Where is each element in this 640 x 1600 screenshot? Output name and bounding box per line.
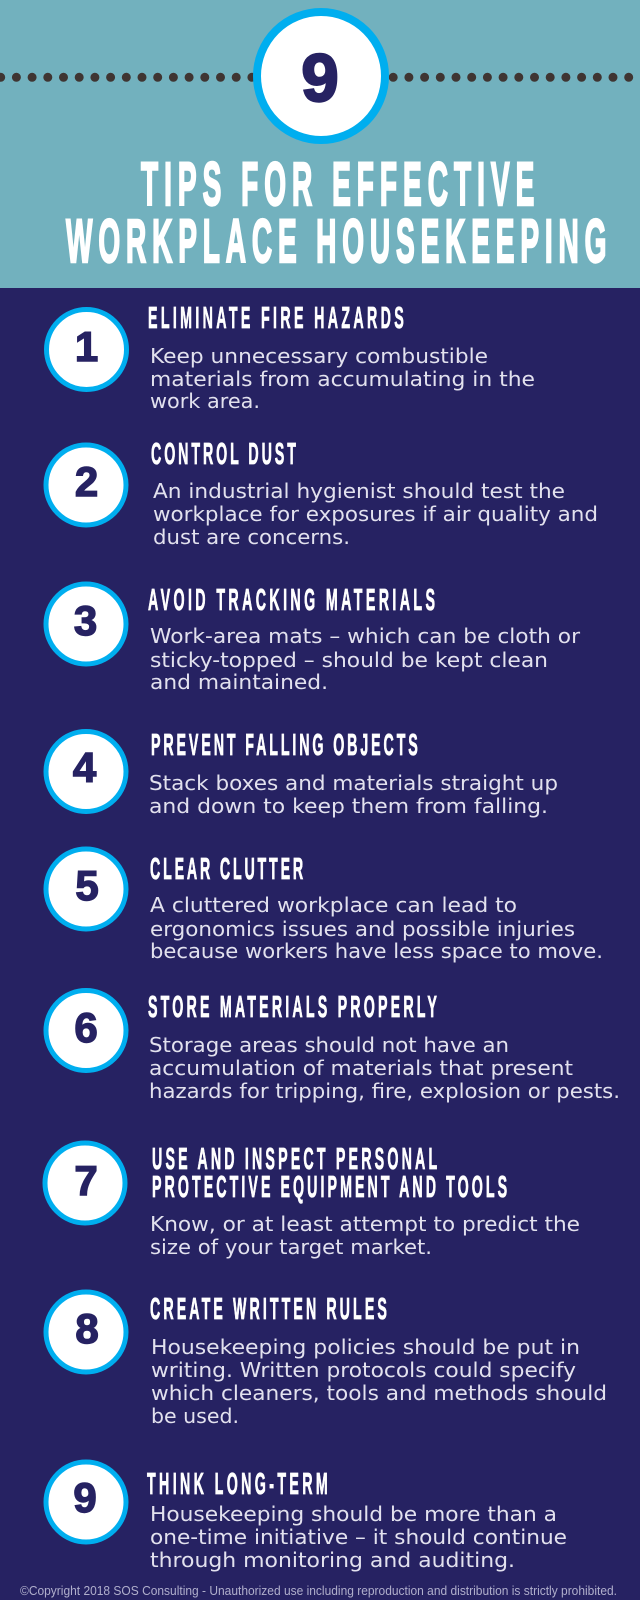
tip 6 bbox=[46, 990, 620, 1103]
text: tip 9 body: Housekeeping should be more than a bbox=[150, 1502, 557, 1526]
text: tip 3 body bbox=[150, 624, 581, 694]
icon: number 6: 6 bbox=[74, 1004, 98, 1051]
text: tip 8 body: writing. Written protocols could specify bbox=[151, 1358, 576, 1382]
text: tip 2 body: An industrial hygienist should test the bbox=[153, 479, 565, 503]
text: tip 9 body: one-time initiative – it should continue bbox=[150, 1525, 567, 1549]
text: tip 4 body bbox=[149, 771, 558, 818]
heading: control dust: CONTROL DUST bbox=[151, 437, 296, 472]
icon: number 4 bbox=[46, 732, 126, 812]
text: tip 7 body bbox=[150, 1212, 580, 1259]
text: tip 5 body: because workers have less space to move. bbox=[150, 939, 603, 963]
text: tip 8 body bbox=[151, 1335, 607, 1428]
text: tip 8 body: Housekeeping policies should be put in bbox=[151, 1335, 580, 1359]
tip 1 bbox=[46, 301, 535, 413]
text: tip 3 body: and maintained. bbox=[150, 670, 328, 694]
heading: store materials properly: STORE MATERIALS PROPERLY bbox=[148, 990, 437, 1025]
text: tip 2 body bbox=[153, 479, 598, 549]
icon: number 9 bbox=[46, 1462, 126, 1542]
icon: number 6 bbox=[46, 990, 126, 1070]
icon: number 3: 3 bbox=[74, 597, 97, 644]
heading: eliminate fire hazards: ELIMINATE FIRE HAZARDS bbox=[148, 301, 404, 336]
icon: number 1: 1 bbox=[75, 323, 98, 370]
text: tip 5 body bbox=[150, 893, 603, 963]
icon: number 9: 9 bbox=[73, 1474, 97, 1521]
panel: header bbox=[0, 0, 640, 288]
tip 3 bbox=[46, 583, 581, 694]
icon: number 5: 5 bbox=[75, 862, 99, 909]
tip 2 bbox=[46, 437, 598, 549]
icon: number 4: 4 bbox=[73, 744, 97, 791]
text: tip 1 body: work area. bbox=[150, 389, 260, 413]
text: tip 9 body: through monitoring and auditing. bbox=[150, 1548, 515, 1572]
text: tip 3 body: Work-area mats – which can be cloth or bbox=[150, 624, 581, 648]
text: tip 8 body: be used. bbox=[151, 1404, 239, 1428]
text: tip 9 body bbox=[150, 1502, 567, 1572]
icon: big number nine badge: 9 bbox=[301, 41, 339, 116]
heading: use and inspect personal protective equipment and tools: PROTECTIVE EQUIPMENT AND TOOLS bbox=[152, 1170, 507, 1205]
title bbox=[66, 151, 606, 276]
heading: use and inspect personal protective equipment and tools bbox=[152, 1142, 507, 1205]
icon: number 5 bbox=[46, 849, 126, 929]
icon: number 8 bbox=[46, 1292, 126, 1372]
text: tip 2 body: dust are concerns. bbox=[153, 525, 350, 549]
heading: clear clutter: CLEAR CLUTTER bbox=[150, 852, 303, 887]
title: WORKPLACE HOUSEKEEPING bbox=[66, 208, 606, 276]
tip 9 bbox=[46, 1462, 567, 1572]
tip 7 bbox=[45, 1142, 580, 1259]
text: tip 3 body: sticky-topped – should be kept clean bbox=[150, 648, 548, 672]
icon: number 7: 7 bbox=[74, 1157, 98, 1204]
title: TIPS FOR EFFECTIVE bbox=[141, 151, 534, 219]
text: tip 4 body: Stack boxes and materials straight up bbox=[149, 771, 558, 795]
icon: big number nine badge bbox=[257, 12, 385, 140]
heading: avoid tracking materials: AVOID TRACKING MATERIALS bbox=[148, 583, 435, 618]
text: tip 6 body: Storage areas should not have an bbox=[149, 1033, 509, 1057]
text: tip 6 body bbox=[149, 1033, 620, 1103]
tip 5 bbox=[46, 849, 603, 963]
text: tip 5 body: ergonomics issues and possible injuries bbox=[150, 917, 575, 941]
text: tip 5 body: A cluttered workplace can lead to bbox=[150, 893, 517, 917]
icon: number 8: 8 bbox=[75, 1305, 99, 1352]
heading: create written rules: CREATE WRITTEN RULES bbox=[150, 1292, 387, 1327]
text: tip 2 body: workplace for exposures if air quality and bbox=[153, 502, 598, 526]
icon: number 2 bbox=[46, 445, 126, 525]
text: tip 8 body: which cleaners, tools and methods should bbox=[151, 1381, 607, 1405]
tip 4 bbox=[46, 728, 558, 818]
icon: number 7 bbox=[45, 1143, 125, 1223]
tip 8 bbox=[46, 1292, 607, 1428]
text: tip 1 body bbox=[150, 344, 535, 413]
heading: use and inspect personal protective equipment and tools: USE AND INSPECT PERSONAL bbox=[152, 1142, 437, 1177]
text: tip 7 body: size of your target market. bbox=[150, 1235, 432, 1259]
icon: number 2: 2 bbox=[75, 458, 98, 505]
heading: prevent falling objects: PREVENT FALLING OBJECTS bbox=[151, 728, 418, 763]
text: tip 4 body: and down to keep them from falling. bbox=[149, 794, 548, 818]
text: tip 1 body: materials from accumulating in the bbox=[150, 367, 535, 391]
heading: think long-term: THINK LONG-TERM bbox=[147, 1467, 328, 1502]
copyright footer: ©Copyright 2018 SOS Consulting - Unauthorized use including reproduction and distribution is strictly prohibited. bbox=[20, 1584, 617, 1598]
icon: number 1 bbox=[46, 310, 126, 390]
icon: number 3 bbox=[46, 584, 126, 664]
text: tip 6 body: hazards for tripping, fire, explosion or pests. bbox=[149, 1079, 620, 1103]
text: tip 6 body: accumulation of materials that present bbox=[149, 1056, 573, 1080]
text: tip 7 body: Know, or at least attempt to predict the bbox=[150, 1212, 580, 1236]
text: tip 1 body: Keep unnecessary combustible bbox=[150, 344, 488, 368]
